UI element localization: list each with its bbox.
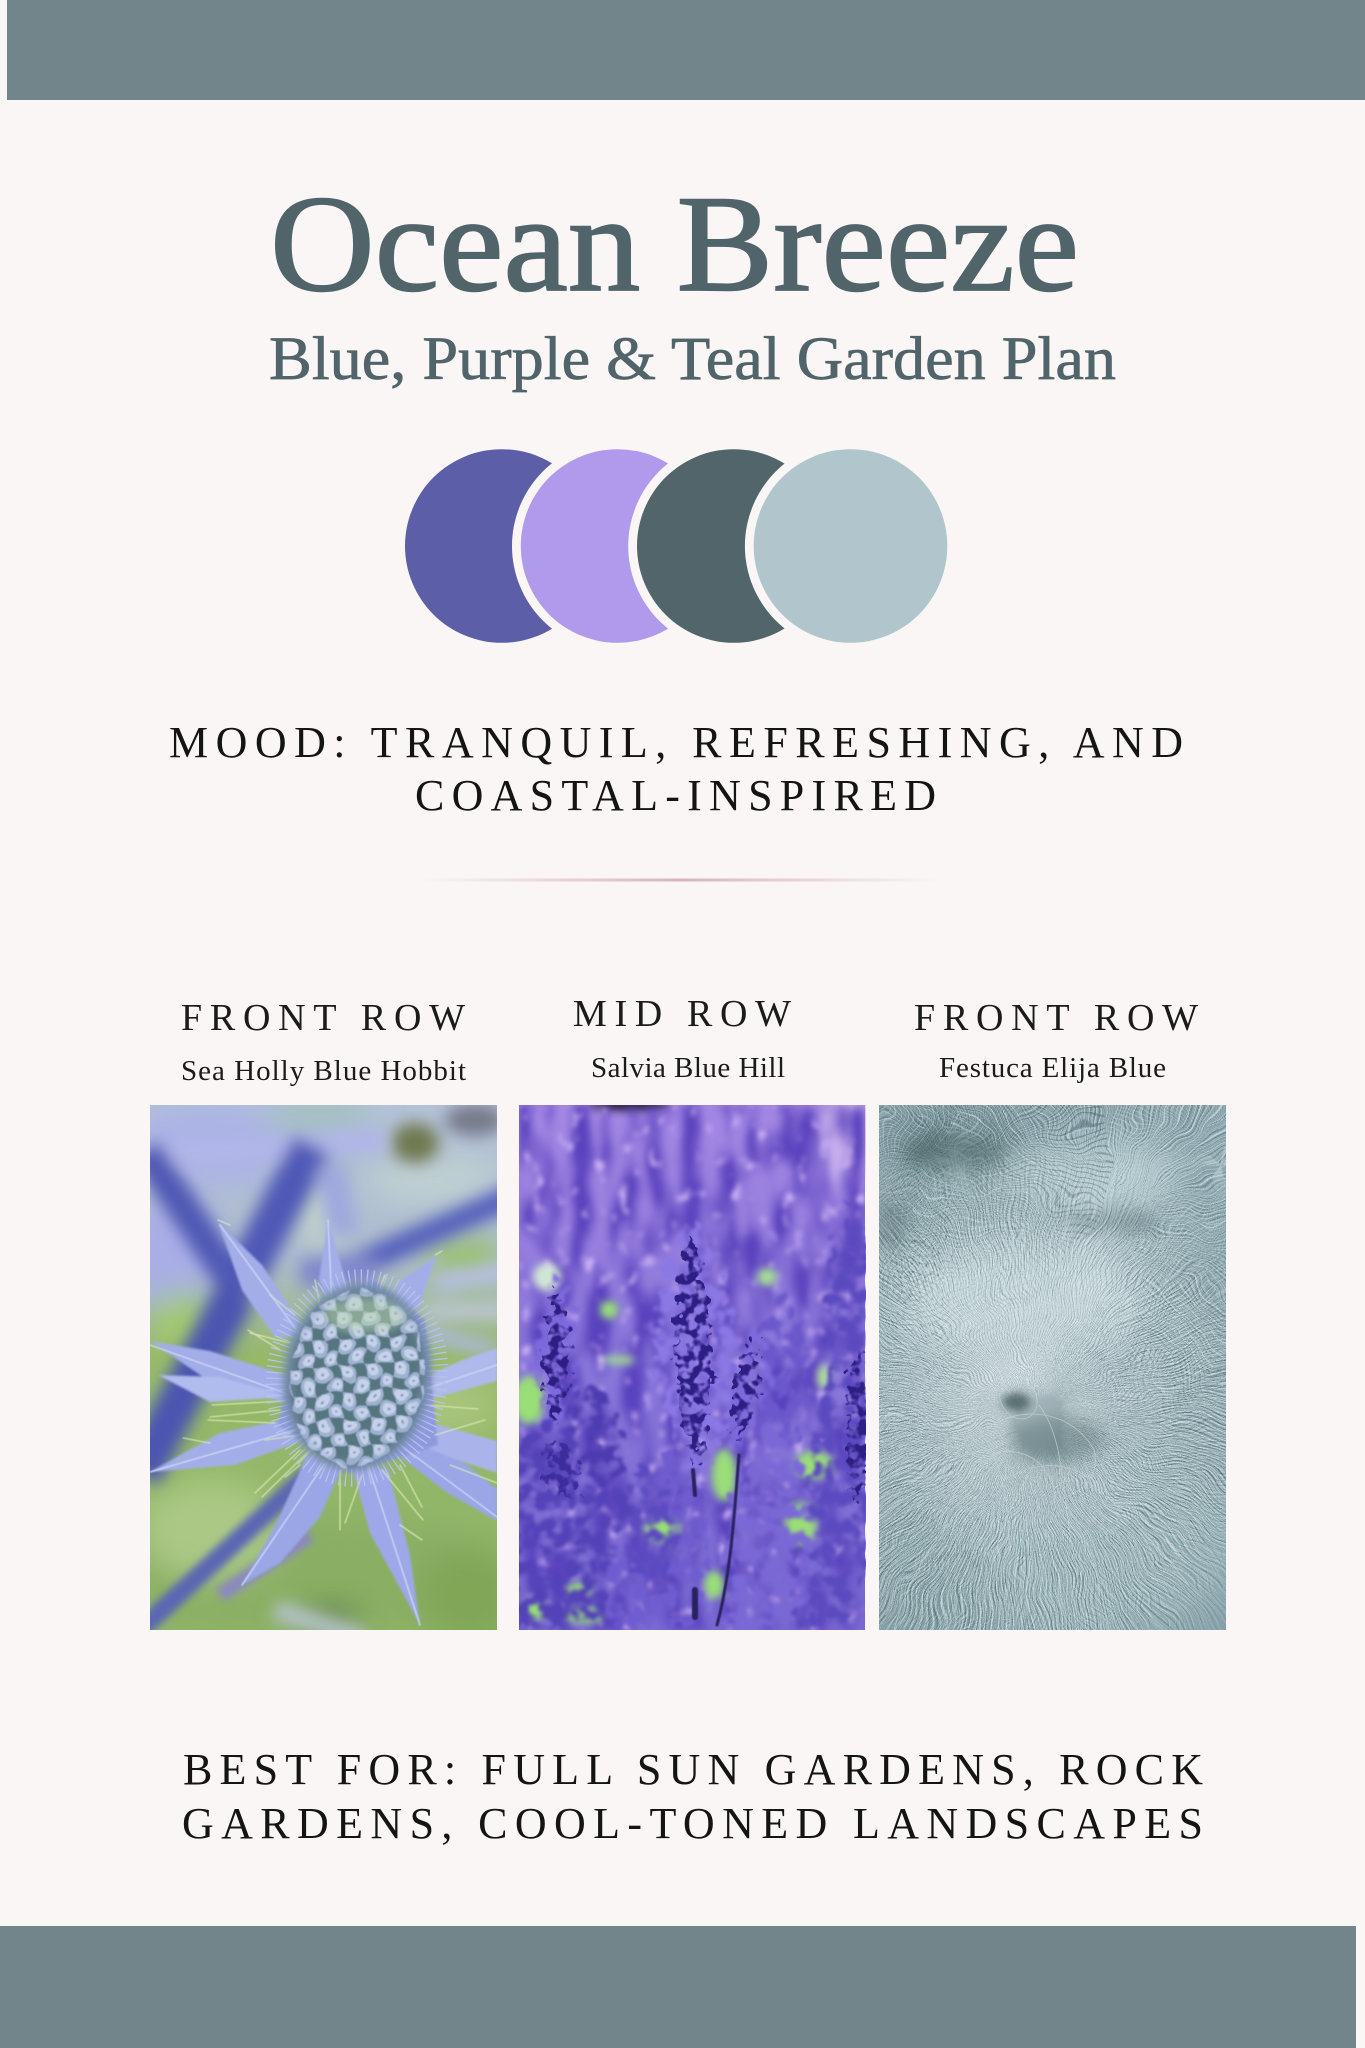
photo: sea holly	[150, 1105, 497, 1630]
back tufts	[809, 1085, 1284, 1330]
subtitle: Blue, Purple & Teal Garden Plan	[269, 326, 1116, 393]
mood text	[169, 718, 1183, 820]
column 3 label: Front Row	[914, 997, 1198, 1084]
column 2 label: Mid Row: Salvia Blue Hill	[591, 1052, 785, 1084]
photo: festuca grass	[879, 1105, 1226, 1630]
swatch: indigo	[405, 449, 599, 643]
swatch: lavender	[512, 440, 723, 652]
green highlights	[513, 1263, 834, 1623]
tangled hairs	[894, 1205, 1189, 1630]
top banner	[7, 0, 1365, 100]
back spikes	[514, 1200, 877, 1630]
column 1 label: Front Row: FRONT ROW	[181, 997, 465, 1039]
column 3 label: Front Row: FRONT ROW	[914, 997, 1198, 1039]
bottom banner	[0, 1926, 1356, 2048]
column 2 label: Mid Row	[573, 993, 791, 1084]
column 3 label: Front Row: Festuca Elija Blue	[939, 1052, 1166, 1084]
bracts	[150, 1220, 497, 1625]
mood text: COASTAL-INSPIRED	[415, 771, 936, 820]
mood text: MOOD: TRANQUIL, REFRESHING, AND	[169, 718, 1183, 767]
best-for text	[182, 1745, 1203, 1848]
column 1 label: Front Row	[181, 997, 466, 1087]
tone overlays	[919, 1247, 1129, 1343]
flower stems	[693, 1455, 739, 1625]
blurred stems	[140, 1140, 520, 1640]
best-for text: BEST FOR: FULL SUN GARDENS, ROCK	[183, 1745, 1203, 1794]
colour palette circles	[405, 440, 956, 652]
swatch: dark teal	[628, 440, 839, 652]
flower head	[264, 1270, 450, 1486]
swatch: pale blue	[745, 440, 956, 652]
photo: salvia	[513, 1085, 877, 1630]
column 2 label: Mid Row: MID ROW	[573, 993, 791, 1035]
best-for text: GARDENS, COOL-TONED LANDSCAPES	[182, 1799, 1203, 1848]
column 1 label: Front Row: Sea Holly Blue Hobbit	[181, 1055, 466, 1087]
main tuft	[879, 1146, 1226, 1630]
title: Ocean Breeze	[270, 167, 1079, 320]
front spikes	[545, 1235, 873, 1507]
divider	[418, 878, 944, 882]
bract spines	[183, 1220, 497, 1540]
